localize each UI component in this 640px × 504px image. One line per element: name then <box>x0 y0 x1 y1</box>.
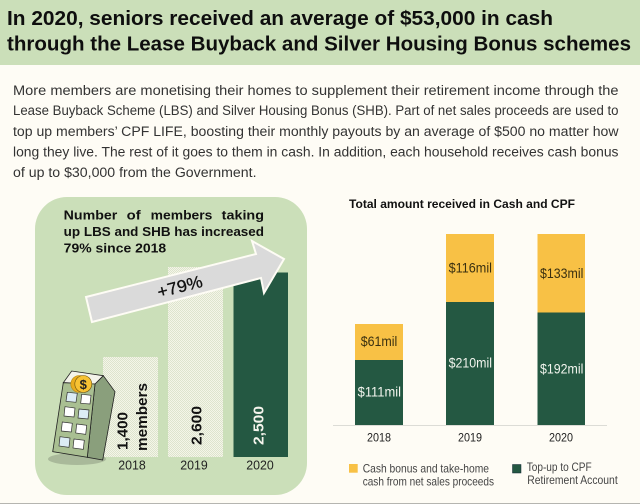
title banner: In 2020, seniors received an average of $53,000 in cash <box>7 7 553 30</box>
bar: 2020 members: 2020 <box>246 458 274 472</box>
bar: 2018 amounts: 2018 <box>367 431 391 445</box>
chart heading: Total amount received in Cash and CPF <box>349 197 575 211</box>
bar: 2018 members: 2018 <box>118 458 146 472</box>
bar: 2019 amounts: $116mil <box>449 260 492 275</box>
bar: 2020 members <box>234 272 288 472</box>
bar: 2020 amounts: 2020 <box>549 431 573 445</box>
intro paragraph: long they live. The rest of it goes to them in cash. In addition, each household receives cash bonus <box>13 144 619 160</box>
panel heading: of <box>127 207 141 222</box>
legend: cash <box>349 461 494 488</box>
intro paragraph: Lease Buyback Scheme (LBS) and Silver Housing Bonus (SHB). Part of net sales proceeds are used to <box>13 103 618 118</box>
bar: 2018 members: members <box>134 383 151 451</box>
bar: 2019 amounts <box>446 234 494 445</box>
panel: members taking up LBS and SHB <box>35 197 307 495</box>
bar: 2020 amounts: $192mil <box>540 361 583 376</box>
bar: 2019 amounts: 2019 <box>458 431 482 445</box>
bar: 2019 amounts: $210mil <box>449 356 492 371</box>
bar: 2018 amounts <box>355 324 403 445</box>
legend: CPF top-up: Top-up to CPF <box>527 460 592 474</box>
intro paragraph: More members are monetising their homes to supplement their retirement income through the <box>13 83 618 98</box>
legend: CPF top-up: Retirement Account <box>527 473 618 487</box>
arrow: +79% growth <box>86 241 284 322</box>
bar: 2018 amounts: $61mil <box>361 334 397 349</box>
bar: 2019 members: 2019 <box>180 458 208 472</box>
bar: 2020 amounts: $133mil <box>540 266 583 281</box>
title banner <box>0 0 640 65</box>
stacked bar chart <box>333 234 607 445</box>
bar: 2018 members <box>103 357 158 472</box>
bar: 2018 members: 1,400 <box>114 412 132 450</box>
arrow: +79% growth: +79% <box>155 272 205 302</box>
panel heading: up LBS and SHB has increased <box>64 224 264 239</box>
intro paragraph: of up to $30,000 from the Government. <box>13 165 256 180</box>
bar: 2018 amounts: $111mil <box>358 385 401 400</box>
panel heading: taking <box>222 207 264 222</box>
legend: CPF top-up <box>512 460 618 487</box>
panel heading: 79% since 2018 <box>64 241 166 256</box>
panel heading <box>64 207 264 256</box>
intro paragraph: top up members’ CPF LIFE, boosting their monthly payouts by an average of $500 no matter how <box>13 124 619 139</box>
panel heading: Number <box>64 207 117 222</box>
bar: 2020 members: 2,500 <box>250 406 267 445</box>
legend: cash: cash from net sales proceeds <box>363 474 494 488</box>
bar: 2019 members <box>168 267 223 472</box>
icon: apartment block with coin <box>48 371 115 465</box>
title banner: through the Lease Buyback and Silver Housing Bonus schemes <box>7 33 631 56</box>
panel heading: members <box>151 207 212 222</box>
legend: cash: Cash bonus and take-home <box>363 461 489 475</box>
bar: 2019 members: 2,600 <box>189 406 206 445</box>
icon: apartment block with coin: $ <box>80 377 88 392</box>
bar: 2020 amounts <box>538 234 585 445</box>
intro paragraph <box>13 83 619 180</box>
